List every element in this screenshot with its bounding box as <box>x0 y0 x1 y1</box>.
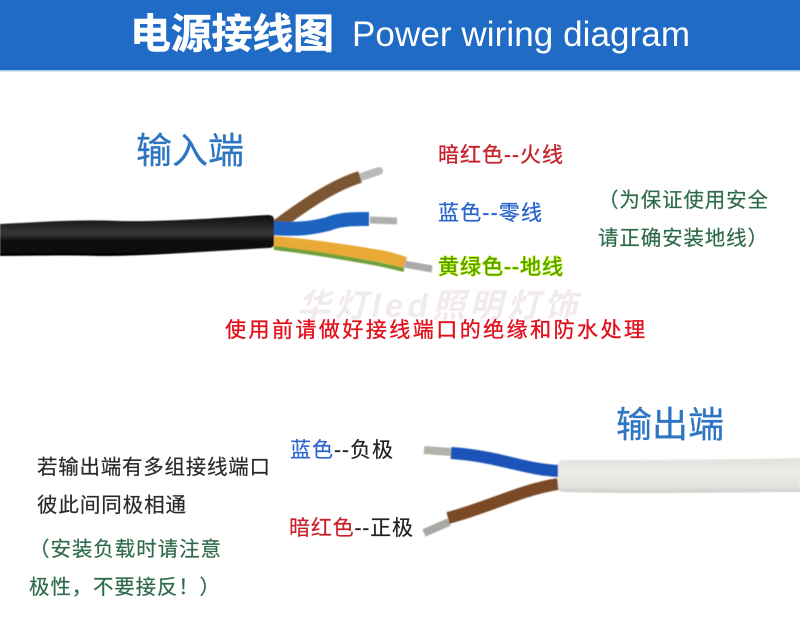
watermark: 华灯led照明灯饰 <box>297 287 582 324</box>
white cable sheath <box>558 458 800 493</box>
header banner <box>0 0 800 72</box>
title: English: Power wiring diagram <box>352 15 690 54</box>
blue neutral wire <box>272 219 397 229</box>
brown positive wire <box>424 484 558 533</box>
black cable sheath <box>0 215 274 256</box>
note: terminals connected <box>37 456 270 517</box>
note: earth wire safety: 请正确安装地线） <box>598 227 768 250</box>
note: terminals connected: 若输出端有多组接线端口 <box>37 456 270 479</box>
note: polarity warning: （安装负载时请注意 <box>29 538 221 561</box>
warning: insulation and waterproofing: 使用前请做好接线端口的绝缘和防水处理 <box>225 319 645 342</box>
title: Chinese: 电源接线图 <box>130 11 334 57</box>
note: polarity warning: 极性，不要接反！） <box>29 576 220 599</box>
label: earth wire: 黄绿色--地线 <box>438 256 563 279</box>
label: negative wire: 蓝色--负极 <box>290 439 393 462</box>
label: live wire: 暗红色--火线 <box>438 144 563 167</box>
note: earth wire safety <box>598 189 768 250</box>
output cable with two wires <box>424 450 800 533</box>
heading: input end: 输入端 <box>136 130 244 171</box>
label: positive wire: 暗红色--正极 <box>289 517 413 540</box>
heading: output end: 输出端 <box>616 404 724 445</box>
input cable with three wires <box>0 171 432 270</box>
brown live wire <box>276 171 379 226</box>
note: terminals connected: 彼此间同极相通 <box>37 494 186 517</box>
yellow-green earth wire <box>274 242 432 270</box>
label: neutral wire: 蓝色--零线 <box>438 202 542 225</box>
blue negative wire <box>424 450 560 471</box>
note: polarity warning <box>29 538 221 599</box>
note: earth wire safety: （为保证使用安全 <box>598 189 768 212</box>
